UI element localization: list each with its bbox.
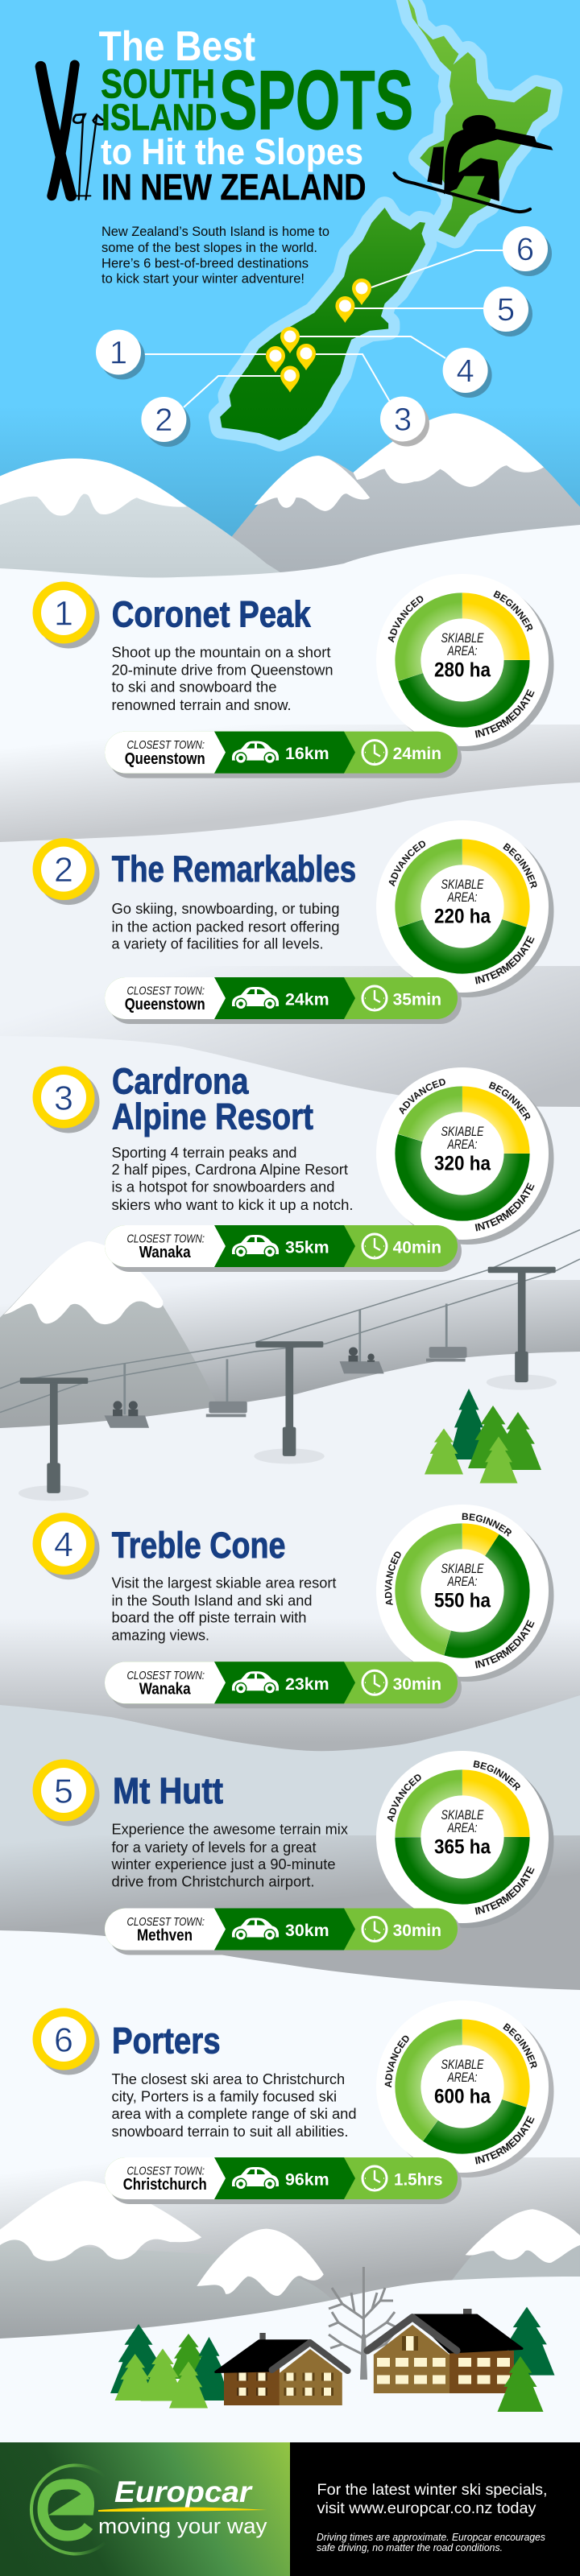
heading: ISLAND (102, 97, 218, 138)
footer: call to action panel: For the latest winter ski specials, (317, 2482, 548, 2499)
info bar: Wanaka (139, 1244, 191, 1261)
description: drive from Christchurch airport. (111, 1874, 314, 1890)
info bar (105, 2157, 462, 2204)
donut chart: skiable area: ADVANCED (385, 1551, 401, 1605)
donut chart: skiable area (376, 1067, 554, 1245)
snowfield band three (0, 1036, 580, 2576)
description: area with a complete range of ski and (111, 2106, 356, 2122)
footer: green logo panel (0, 2442, 290, 2576)
donut chart: skiable area: SKIABLE (441, 630, 484, 646)
donut chart: skiable area: BEGINNER (474, 1760, 520, 1791)
tree: village right front (498, 2356, 543, 2412)
number badge: 5 (54, 1773, 73, 1811)
donut chart: skiable area: 550 ha (434, 1589, 491, 1612)
map number 4 (443, 348, 492, 398)
intro text: some of the best slopes in the world. (102, 241, 317, 255)
description (111, 1145, 353, 1213)
sky background (0, 0, 580, 580)
number badge (32, 581, 100, 649)
map number 5 (483, 287, 532, 336)
panel: Porters (32, 2000, 554, 2204)
description: is a hotspot for snowboarders and (111, 1179, 335, 1195)
snow ground of chairlift scene (0, 1352, 580, 2576)
illustration: chairlift (0, 1230, 580, 1501)
donut chart: skiable area (376, 2000, 554, 2178)
donut chart: skiable area: AREA: (447, 1137, 478, 1152)
donut chart: skiable area: 365 ha (434, 1835, 491, 1858)
info bar: 30min (393, 1922, 441, 1940)
donut chart: skiable area: BEGINNER (503, 843, 536, 889)
donut chart: skiable area: SKIABLE (441, 1124, 484, 1139)
resort name: Coronet Peak (112, 594, 312, 634)
intro text: Here’s 6 best-of-breed destinations (102, 257, 309, 271)
illustration: New Zealand map (220, 0, 551, 440)
info bar: 16km (285, 745, 329, 763)
resort name (112, 1061, 313, 1137)
description: for a variety of levels for a great (111, 1839, 316, 1856)
info bar: CLOSEST TOWN: (127, 2164, 205, 2178)
description: snowboard terrain to suit all abilities. (111, 2124, 348, 2140)
snowfield band four (0, 1695, 580, 2576)
donut chart: skiable area: ADVANCED (400, 1079, 445, 1115)
number badge (32, 1066, 100, 1133)
map number 4: 4 (456, 353, 474, 389)
donut chart: skiable area: 600 ha (434, 2085, 491, 2107)
resort name: Alpine Resort (112, 1096, 313, 1137)
donut chart: skiable area: ADVANCED (385, 2035, 409, 2088)
donut chart: skiable area: SKIABLE (441, 1807, 484, 1823)
number badge: 4 (54, 1525, 73, 1564)
donut chart: skiable area: INTERMEDIATE (475, 689, 535, 737)
resort name: Mt Hutt (113, 1770, 223, 1811)
info bar: Christchurch (123, 2176, 207, 2194)
description: Visit the largest skiable area resort (111, 1575, 337, 1591)
panel: Mt Hutt (32, 1751, 554, 1955)
panel: Cardrona Alpine Resort (32, 1061, 554, 1272)
snowfield band five (0, 1930, 580, 2576)
info bar: 30km (285, 1922, 329, 1940)
donut chart: skiable area: INTERMEDIATE (475, 1183, 535, 1232)
number badge: 3 (54, 1079, 73, 1117)
resort name: Treble Cone (112, 1525, 285, 1566)
donut chart: skiable area (376, 1751, 554, 1928)
info bar: 24km (285, 990, 329, 1009)
footer: call to action panel (290, 2442, 580, 2576)
heading: The Best (99, 23, 255, 70)
info bar (105, 977, 462, 1024)
trees: village left (110, 2324, 230, 2409)
info bar: Methven (137, 1927, 193, 1945)
donut chart: skiable area: SKIABLE (441, 1561, 484, 1576)
footer: call to action panel: safe driving, no matter the road conditions. (317, 2541, 503, 2553)
footer: call to action panel: visit www.europcar.co.nz today (317, 2500, 536, 2517)
description: to ski and snowboard the (111, 679, 277, 696)
donut chart: skiable area: AREA: (447, 1820, 478, 1835)
chalet left (216, 2333, 348, 2405)
info bar: CLOSEST TOWN: (127, 1669, 205, 1682)
number badge (32, 1760, 100, 1826)
donut chart: skiable area: INTERMEDIATE (475, 1866, 535, 1914)
description (111, 901, 340, 952)
info bar: CLOSEST TOWN: (127, 984, 205, 998)
info bar: 35min (393, 990, 441, 1009)
description: city, Porters is a family focused ski (111, 2089, 337, 2105)
number badge (32, 2008, 100, 2075)
map number 3: 3 (394, 402, 412, 438)
info bar (105, 1908, 462, 1955)
description: 20-minute drive from Queenstown (111, 662, 334, 678)
panel: Coronet Peak (32, 574, 554, 778)
intro text (102, 225, 329, 287)
info bar: Wanaka (139, 1681, 191, 1699)
snowfield band two (0, 782, 580, 2576)
donut chart: skiable area (376, 574, 554, 751)
description (111, 1575, 337, 1644)
number badge: 2 (54, 851, 73, 890)
description: Shoot up the mountain on a short (111, 645, 330, 661)
info bar: 30min (393, 1675, 441, 1694)
description (111, 645, 334, 713)
description: amazing views. (111, 1628, 209, 1644)
donut chart: skiable area (376, 1505, 554, 1682)
description: 2 half pipes, Cardrona Alpine Resort (111, 1162, 348, 1178)
number badge: 1 (54, 594, 73, 633)
heading: to Hit the Slopes (101, 131, 363, 172)
info bar: 24min (393, 745, 441, 763)
map number 1 (96, 330, 145, 380)
map number 6 (503, 226, 552, 276)
donut chart: skiable area: BEGINNER (462, 1513, 512, 1537)
panel: Treble Cone (32, 1505, 554, 1708)
map number 2 (141, 397, 190, 447)
map number 2: 2 (155, 402, 173, 438)
illustration: mountains behind village (0, 2181, 580, 2339)
donut chart: skiable area: INTERMEDIATE (475, 935, 535, 984)
snow ground of village scene (0, 2277, 580, 2447)
description: Experience the awesome terrain mix (111, 1822, 348, 1838)
info bar: Queenstown (125, 996, 205, 1013)
donut chart: skiable area: 320 ha (434, 1153, 491, 1175)
logo wordmark: Europcar (114, 2475, 254, 2508)
info bar: 96km (285, 2170, 329, 2190)
info bar: 1.5hrs (394, 2170, 443, 2190)
number badge: 6 (54, 2021, 73, 2059)
donut chart: skiable area (376, 820, 554, 997)
map leader lines (140, 250, 503, 407)
map pins (266, 279, 371, 393)
heading: SPOTS (219, 54, 413, 147)
info bar (105, 1225, 462, 1272)
icon: crossed skis and poles (41, 64, 106, 200)
footer: call to action panel: Driving times are approximate. Europcar encourages (317, 2531, 545, 2543)
logo tagline: moving your way (98, 2514, 267, 2538)
info bar: 40min (393, 1238, 441, 1257)
info bar: CLOSEST TOWN: (127, 738, 205, 752)
info bar: CLOSEST TOWN: (127, 1915, 205, 1929)
heading (99, 23, 413, 208)
donut chart: skiable area: INTERMEDIATE (475, 2116, 535, 2164)
description (111, 2071, 356, 2140)
map number 1: 1 (110, 335, 127, 370)
map number 5: 5 (497, 292, 515, 328)
donut chart: skiable area: SKIABLE (441, 2057, 484, 2072)
donut chart: skiable area: AREA: (447, 890, 478, 905)
info bar: CLOSEST TOWN: (127, 1232, 205, 1246)
map number 6: 6 (516, 232, 534, 267)
intro text: New Zealand’s South Island is home to (102, 225, 329, 239)
description (110, 1822, 348, 1890)
illustration: mountain behind chairlift (0, 1241, 230, 1435)
map number 3 (380, 396, 429, 446)
description: a variety of facilities for all levels. (111, 935, 324, 952)
tree: village right back (499, 2307, 554, 2376)
donut chart: skiable area: AREA: (447, 2070, 478, 2085)
description: in the South Island and ski and (111, 1593, 313, 1609)
description: winter experience just a 90-minute (110, 1856, 336, 1872)
bare tree (329, 2267, 395, 2380)
icon: snowboarder silhouette (394, 115, 553, 212)
info bar: 23km (285, 1675, 329, 1694)
logo swoosh (98, 2507, 267, 2512)
info bar: 35km (285, 1238, 329, 1257)
trees: chairlift scene (425, 1389, 541, 1483)
number badge (32, 1513, 100, 1579)
snowfield band one (0, 525, 580, 2576)
heading: SOUTH (101, 61, 215, 106)
description: in the action packed resort offering (111, 919, 340, 935)
description: Sporting 4 terrain peaks and (111, 1145, 296, 1161)
donut chart: skiable area: BEGINNER (493, 591, 533, 632)
description: skiers who want to kick it up a notch. (111, 1197, 353, 1213)
heading: IN NEW ZEALAND (102, 167, 366, 208)
description: Go skiing, snowboarding, or tubing (111, 901, 340, 917)
info bar: Queenstown (125, 750, 205, 768)
description: renowned terrain and snow. (111, 697, 292, 713)
illustration: snowy mountains in header (0, 413, 580, 582)
donut chart: skiable area: ADVANCED (388, 840, 425, 887)
chalet right (367, 2309, 522, 2393)
description: board the off piste terrain with (111, 1610, 306, 1626)
resort name: The Remarkables (112, 848, 356, 890)
description: The closest ski area to Christchurch (111, 2071, 345, 2087)
number badge (32, 838, 100, 905)
donut chart: skiable area: AREA: (447, 643, 478, 658)
panel: The Remarkables (32, 820, 554, 1024)
resort name: Porters (112, 2021, 221, 2061)
donut chart: skiable area: ADVANCED (387, 1774, 421, 1823)
donut chart: skiable area: SKIABLE (441, 877, 484, 892)
donut chart: skiable area: AREA: (447, 1574, 478, 1589)
resort name: Cardrona (112, 1061, 249, 1101)
donut chart: skiable area: ADVANCED (388, 596, 424, 642)
donut chart: skiable area: BEGINNER (488, 1082, 530, 1121)
intro text: to kick start your winter adventure! (102, 272, 304, 287)
donut chart: skiable area: BEGINNER (503, 2023, 536, 2069)
donut chart: skiable area: 220 ha (434, 905, 491, 927)
icon: Europcar e logo (31, 2465, 105, 2553)
info bar (105, 1662, 462, 1708)
donut chart: skiable area: INTERMEDIATE (475, 1620, 535, 1668)
info bar (105, 732, 462, 778)
donut chart: skiable area: 280 ha (434, 658, 491, 681)
